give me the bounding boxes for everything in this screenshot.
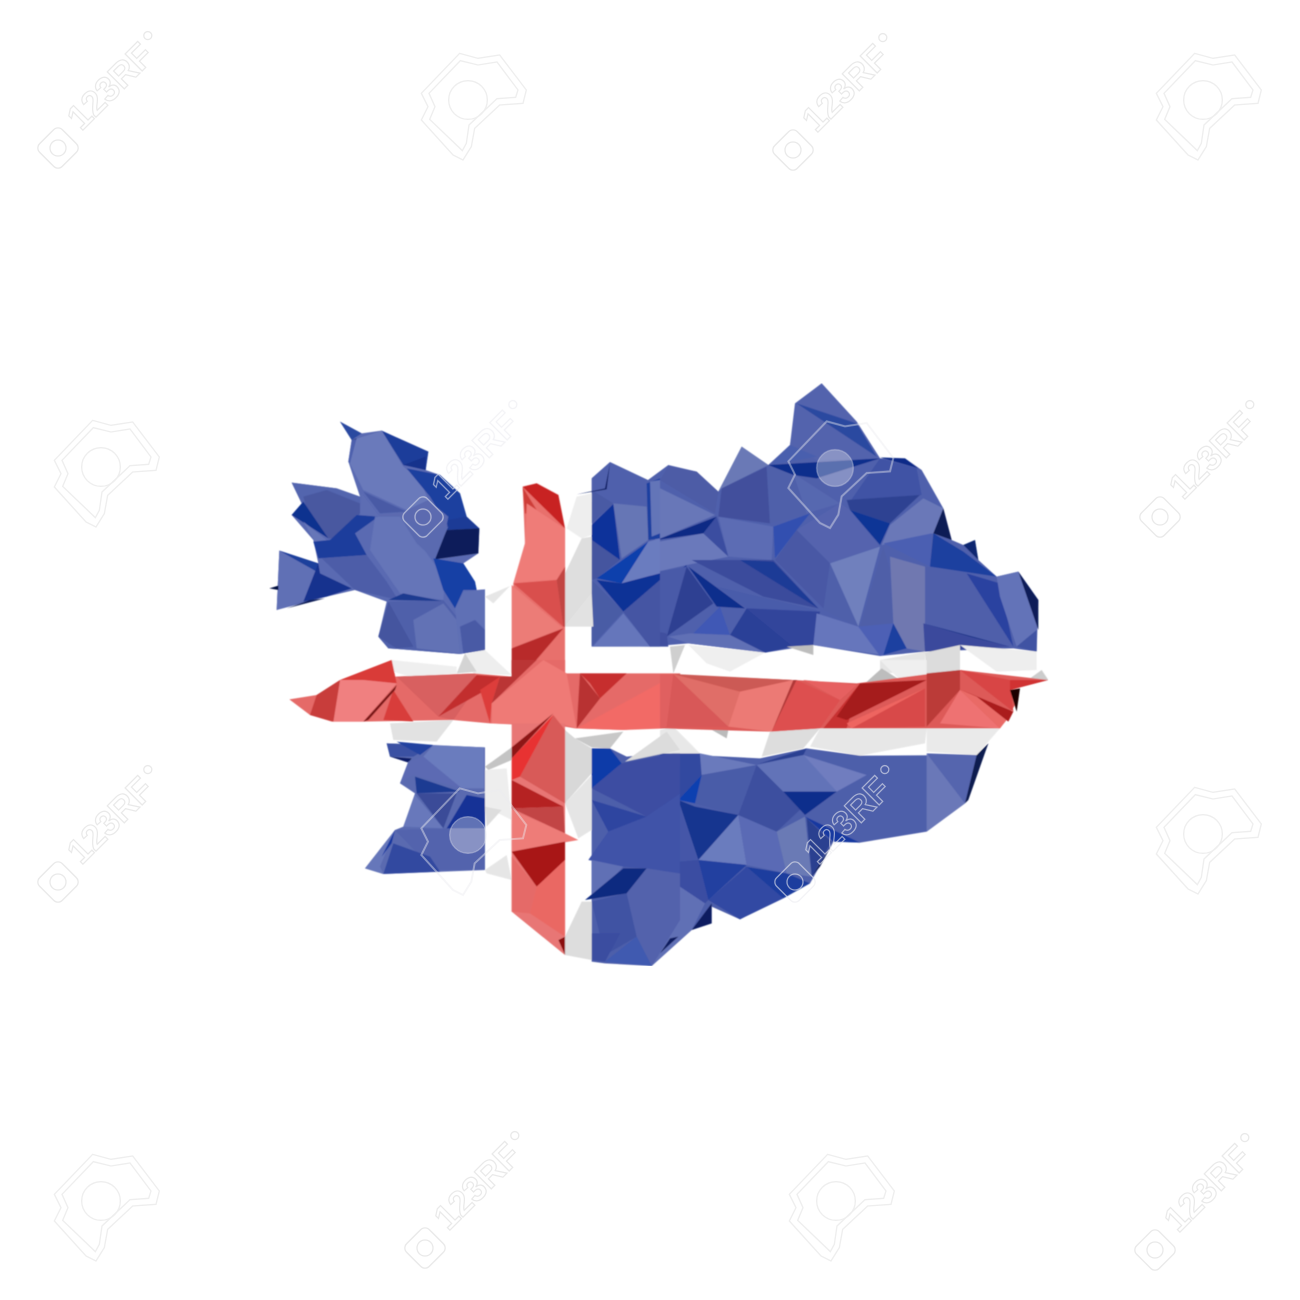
watermark: logo over south-east: 123RF [796,770,898,871]
watermark: icon over south-west [421,788,526,895]
watermark: logo bottom right [1125,1128,1270,1273]
watermark: logo top left: 123RF [59,36,161,137]
watermark: logo over Westfjords [393,395,538,540]
south-east blue section [592,743,988,966]
watermark: icon bottom left [54,1154,159,1261]
watermark: logo second row right [1130,395,1275,540]
north-west blue section: Westfjords [269,422,485,654]
watermark: logo over Westfjords: 123RF [424,405,526,506]
watermark: logo bottom right: 123RF [1156,1138,1258,1239]
watermark: logo over south-east [765,760,910,905]
south-west blue section and lower blue quadrant [365,742,680,966]
watermark: icon second row left [54,420,159,527]
red cross: vertical bar, top [512,483,565,677]
watermark: icon top right [1156,53,1261,160]
map: low-poly Iceland with flag pattern [269,383,1048,966]
watermark: icon top centre [421,53,526,160]
white cross shading: grey facets [390,493,1048,960]
watermark: logo second row right: 123RF [1161,405,1263,506]
watermark: logo third row left [28,760,173,905]
watermark: logo top right of centre [763,28,908,173]
north-east blue section [592,383,1038,656]
watermark: logo bottom centre left: 123RF [426,1136,528,1237]
north-west corner of the large blue quadrant [577,462,660,647]
watermark: logo top left [28,26,173,171]
red cross: horizontal band, east part [660,670,1048,732]
watermark: icon bottom centre right [789,1154,894,1261]
red cross: horizontal band, west part, and vertical bar, south [289,660,680,955]
watermark: icon over north-east [788,421,893,528]
watermark: logo bottom centre left [395,1126,540,1271]
watermark: icon third row right [1156,787,1261,894]
watermark: logo third row left: 123RF [59,770,161,871]
watermark: logo top right of centre: 123RF [794,38,896,139]
